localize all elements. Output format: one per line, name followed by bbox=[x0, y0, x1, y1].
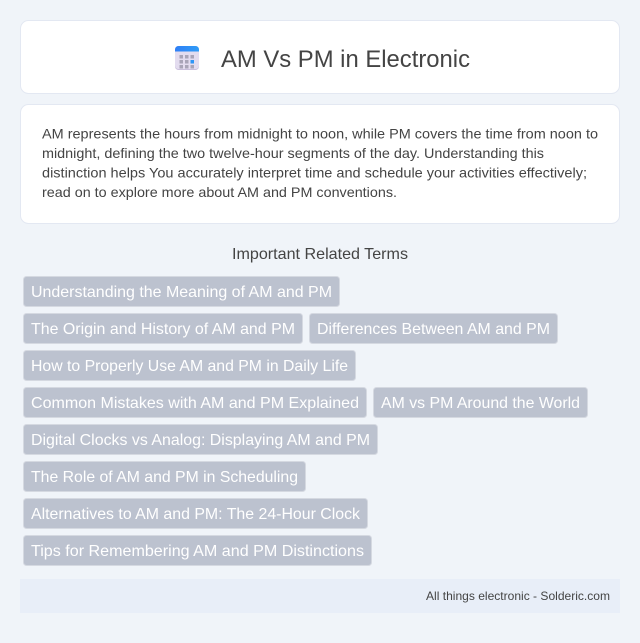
tag bbox=[24, 462, 306, 492]
tag bbox=[24, 314, 302, 344]
text block: description: AM represents the hours from midnight to noon, while PM covers the time from noon to bbox=[42, 126, 598, 142]
tag bbox=[24, 276, 340, 306]
tag: Differences Between AM and PM bbox=[317, 321, 550, 338]
tag: AM vs PM Around the World bbox=[381, 395, 580, 412]
tag: How to Properly Use AM and PM in Daily Life bbox=[31, 358, 348, 375]
icon: calendar bbox=[175, 46, 199, 70]
tag bbox=[24, 350, 356, 380]
tag: The Origin and History of AM and PM bbox=[31, 321, 295, 338]
panel: description bbox=[20, 104, 620, 224]
tag: Common Mistakes with AM and PM Explained bbox=[31, 395, 359, 412]
tag: Understanding the Meaning of AM and PM bbox=[31, 284, 332, 301]
panel: header bbox=[20, 20, 620, 94]
tag: The Role of AM and PM in Scheduling bbox=[31, 469, 298, 486]
tag bbox=[24, 498, 368, 528]
tag bbox=[24, 388, 366, 418]
text block: description: distinction helps You accurately interpret time and schedule your activities effectively; bbox=[42, 164, 587, 180]
tag bbox=[310, 314, 558, 344]
tag bbox=[24, 536, 372, 566]
heading: related terms: Important Related Terms bbox=[232, 246, 408, 263]
tags list bbox=[24, 276, 588, 566]
text block: description bbox=[42, 126, 598, 200]
tag: Alternatives to AM and PM: The 24-Hour Clock bbox=[31, 506, 361, 523]
footer text: All things electronic - Solderic.com bbox=[426, 589, 610, 603]
footer bbox=[20, 579, 620, 613]
tag: Tips for Remembering AM and PM Distinctions bbox=[31, 543, 364, 560]
tag: Digital Clocks vs Analog: Displaying AM and PM bbox=[31, 432, 370, 449]
tag bbox=[374, 388, 588, 418]
title: AM Vs PM in Electronic bbox=[221, 46, 470, 73]
text block: description: midnight, defining the two twelve-hour segments of the day. Understanding this bbox=[42, 145, 544, 161]
tag bbox=[24, 424, 378, 454]
text block: description: read on to explore more about AM and PM conventions. bbox=[42, 184, 397, 200]
